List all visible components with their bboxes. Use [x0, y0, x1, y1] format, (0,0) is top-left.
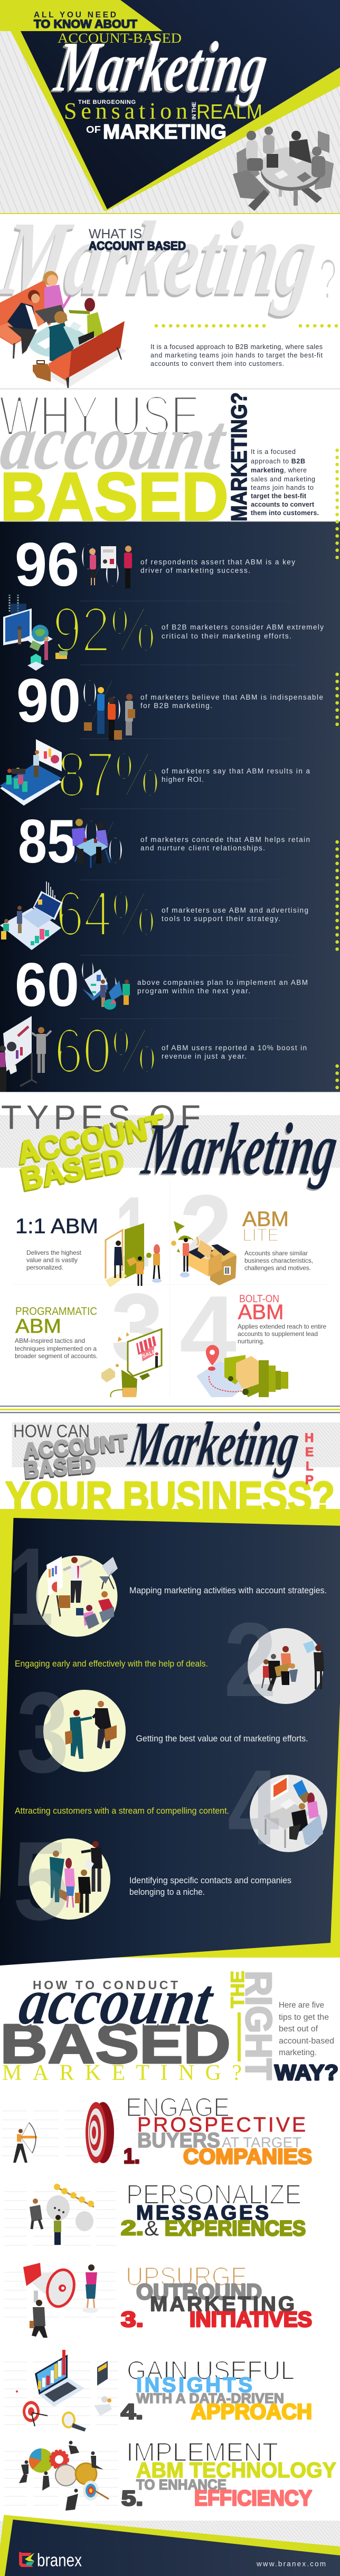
- ampersand: &: [144, 2217, 159, 2240]
- illustration: desk with monitors: [263, 1775, 323, 1848]
- stat: 64 percent: 64%: [56, 878, 156, 950]
- heading: account tilted: ACCOUNT: [23, 1430, 129, 1464]
- heading: initiatives: INITIATIVES: [190, 2307, 312, 2331]
- hero subheading: sensation: Sensation: [64, 98, 187, 124]
- title: ABM: [242, 1207, 289, 1231]
- heading: companies: COMPANIES: [183, 2144, 312, 2168]
- hero kicker: all you need: ALL YOU NEED: [34, 11, 116, 20]
- item 5: identify contacts: [13, 1818, 291, 1944]
- stat text: of respondents assert that ABM is a key: [140, 558, 295, 566]
- stat: 87 percent: 87%: [58, 739, 160, 810]
- text: Engaging early and effectively with the help of deals.: [15, 1659, 208, 1669]
- text: [129, 1876, 291, 1897]
- heading: at target: AT TARGET: [222, 2134, 301, 2151]
- panel: statistics: [0, 450, 340, 1093]
- number 3: 3.: [121, 2307, 144, 2331]
- stat text: of marketers say that ABM results in a: [162, 767, 310, 775]
- panel: footer: [0, 2515, 340, 2576]
- illustration: handshake deal: [65, 1701, 117, 1759]
- navy panel: [0, 1518, 340, 1965]
- description text: tips to get the: [279, 2013, 329, 2022]
- description text: marketing.: [279, 2048, 317, 2057]
- dotted rule: [156, 324, 340, 327]
- icon: delivery truck and map: [196, 1345, 288, 1397]
- heading: efficiency: EFFICIENCY: [194, 2486, 312, 2510]
- number 2: 2: [180, 1174, 232, 1289]
- number 5: 5: [13, 1818, 69, 1944]
- heading: account based: ACCOUNT BASED: [89, 239, 186, 253]
- description text: It is a focused: [251, 448, 296, 456]
- title: ABM: [238, 1301, 284, 1324]
- description text: best out of: [279, 2025, 318, 2033]
- item 1: mapping: [8, 1525, 327, 1649]
- stat text: for B2B marketing.: [140, 702, 212, 710]
- panel: types of account based marketing: [0, 1098, 340, 1397]
- heading: prospective: PROSPECTIVE: [137, 2114, 306, 2136]
- text: Identifying specific contacts and companies: [129, 1876, 291, 1885]
- description text: and marketing teams join hands to target the best-fit: [150, 352, 323, 359]
- title: LITE: [242, 1225, 279, 1245]
- description: Delivers the highest: [26, 1249, 82, 1256]
- text: Getting the best value out of marketing efforts.: [136, 1734, 308, 1744]
- stat: 92 percent: 92%: [53, 594, 156, 665]
- description text: approach to B2B: [251, 458, 305, 465]
- panel: why use account based marketing: [0, 384, 319, 535]
- description text: account-based: [279, 2037, 334, 2046]
- heading: personalize: PERSONALIZE: [126, 2180, 301, 2210]
- number 2: 2.: [121, 2217, 144, 2240]
- text: Attracting customers with a stream of compelling content.: [15, 1806, 229, 1816]
- hero heading: account-based: ACCOUNT-BASED: [58, 31, 182, 46]
- stat text: and nurture client relationships.: [140, 844, 265, 852]
- description text: teams join hands to: [251, 484, 314, 491]
- stat text: [162, 906, 308, 923]
- icon: laptop analytics: [0, 882, 63, 950]
- stat: 60 percent plan: %: [79, 946, 119, 1010]
- description: challenges and motives.: [244, 1264, 311, 1272]
- panel: hero: [0, 0, 340, 214]
- icon: laptop analytics: [16, 2350, 112, 2432]
- title: [15, 1305, 97, 1338]
- heading: abm technology: ABM TECHNOLOGY: [136, 2458, 336, 2482]
- hero kicker: to know about: TO KNOW ABOUT: [34, 17, 138, 31]
- description text: them into customers.: [251, 509, 319, 517]
- panel: tip 1 engage: [2, 2093, 312, 2168]
- description: [238, 1323, 326, 1345]
- item 4: compelling content: [15, 1748, 327, 1867]
- icon: handshake: [84, 687, 135, 741]
- stat text: of marketers use ABM and advertising: [162, 906, 308, 914]
- panel: tip 2 personalize: [4, 2180, 306, 2246]
- text: Mapping marketing activities with account strategies.: [129, 1586, 327, 1595]
- panel: how can ABM help your business: [0, 1409, 340, 1965]
- stat text: driver of marketing success.: [140, 566, 250, 575]
- heading: insights: INSIGHTS: [136, 2374, 252, 2397]
- heading: implement: IMPLEMENT: [126, 2437, 278, 2467]
- stat: 96 percent: %: [79, 529, 121, 601]
- stat: 90 percent: [16, 665, 323, 741]
- illustration: audience with presenter: [262, 1641, 324, 1691]
- icon: couple at cafe table: [72, 819, 110, 868]
- description text: [251, 448, 319, 517]
- icon: open boxes: [171, 1221, 237, 1285]
- logo: branex: branex: [37, 2551, 82, 2571]
- heading: help stacked: P: [305, 1473, 314, 1487]
- description: [244, 1250, 313, 1272]
- stat: 85 percent: [18, 806, 310, 878]
- heading: account script: account: [0, 398, 233, 487]
- stat text: of B2B marketers consider ABM extremely: [162, 623, 324, 631]
- panel: how to conduct ABM the right way: [0, 1965, 338, 2085]
- description: value and is vastly: [26, 1256, 78, 1264]
- panel: tip 5 implement: [4, 2437, 336, 2511]
- stat text: critical to their marketing efforts.: [162, 632, 291, 640]
- icon: megaphone: [23, 2263, 98, 2338]
- heading: types of: TYPES OF: [1, 1098, 201, 1136]
- description text: target the best-fit: [251, 492, 307, 500]
- stat text: [137, 979, 308, 995]
- panel: what is account based marketing: [0, 200, 340, 390]
- title: PROGRAMMATIC: [15, 1305, 97, 1318]
- heading: help stacked: [305, 1431, 314, 1487]
- heading: help stacked: L: [306, 1459, 314, 1474]
- description: business characteristics,: [244, 1257, 313, 1264]
- stat text: revenue in just a year.: [162, 1052, 247, 1060]
- heading: with a data-driven: WITH A DATA-DRIVEN: [136, 2390, 284, 2406]
- description: personalized.: [26, 1264, 63, 1271]
- heading: account tilted: ACCOUNT: [15, 1108, 168, 1170]
- divider lines: [0, 1406, 340, 1413]
- number 1: 1: [8, 1525, 53, 1649]
- panel: tip 3 upsurge: [4, 2262, 312, 2338]
- icon: presentation: [89, 546, 132, 588]
- card: bolt-on ABM: [180, 1275, 326, 1397]
- icon: archer and target: [13, 2102, 114, 2163]
- stat text: above companies plan to implement an ABM: [137, 979, 308, 986]
- logo: branex: [19, 2551, 82, 2571]
- stat text: [162, 1044, 307, 1060]
- icon: teamwork gears: [19, 2441, 109, 2511]
- stat: 64 percent: [0, 878, 308, 950]
- heading: the rotated: THE: [228, 1971, 248, 2008]
- heading: what is: WHAT IS: [89, 227, 142, 241]
- number 5: 5.: [121, 2487, 143, 2510]
- description: techniques implemented on a: [15, 1345, 97, 1352]
- heading: way: WAY?: [275, 2060, 338, 2085]
- stat text: tools to support their strategy.: [162, 915, 280, 923]
- hero lime wedge: [0, 0, 340, 211]
- heading: based tilted: BASED: [23, 1451, 97, 1483]
- hero subheading: marketing: MARKETING: [103, 121, 226, 143]
- heading: approach: APPROACH: [191, 2399, 312, 2424]
- stat text: [162, 767, 310, 783]
- stat: 90 percent: 90: [16, 666, 81, 735]
- description text: [279, 2001, 334, 2057]
- icon: reviews and chat bubbles: [30, 2184, 94, 2245]
- description: Accounts share similar: [244, 1250, 308, 1257]
- heading: why use: WHY USE: [0, 384, 200, 448]
- heading: help stacked: H: [305, 1431, 314, 1445]
- website url: www.branex.com: [256, 2560, 326, 2568]
- number 4: 4: [180, 1275, 237, 1387]
- title: ABM: [15, 1315, 61, 1338]
- stat text: [140, 558, 295, 575]
- description text: Here are five: [279, 2001, 324, 2010]
- hero navy triangle: [21, 0, 340, 209]
- stat: 60 percent plan: 60: [15, 950, 79, 1019]
- heading: messages: MESSAGES: [136, 2202, 269, 2224]
- heading: gain useful: GAIN USEFUL: [127, 2356, 295, 2385]
- icon: door delivery: [106, 1223, 162, 1287]
- description: [26, 1249, 82, 1271]
- stat text: [140, 693, 323, 710]
- text: belonging to a niche.: [129, 1887, 205, 1897]
- heading: account script: account: [15, 1965, 219, 2038]
- item 3: best value: [16, 1669, 308, 1797]
- heading: marketing rotated: MARKETING?: [226, 392, 251, 521]
- stat: 90 percent: %: [81, 665, 123, 737]
- hero subheading: of: OF: [86, 124, 101, 135]
- stat: 60 percent revenue: 60%: [54, 1015, 157, 1087]
- stat: 60 percent plan: [15, 946, 308, 1019]
- icon: global finance: [3, 595, 68, 671]
- heading: marketing: MARKETING: [150, 2292, 295, 2316]
- description: ABM-inspired tactics and: [15, 1337, 85, 1344]
- heading: how to conduct: HOW TO CONDUCT: [33, 1978, 178, 1992]
- description text: It is a focused approach to B2B marketing, where sales: [150, 343, 323, 351]
- stat: 60 percent revenue: [0, 1015, 307, 1092]
- number 3: 3: [111, 1274, 164, 1382]
- hero subheading: realm: REALM: [196, 101, 262, 123]
- description text: sales and marketing: [251, 476, 315, 483]
- stat: 96 percent: [15, 529, 295, 601]
- item 2: engaging: [15, 1601, 324, 1719]
- title: 1:1 ABM: [15, 1215, 98, 1238]
- stat: 96 percent: 96: [15, 530, 79, 599]
- heading: how can: HOW CAN: [13, 1421, 90, 1441]
- stat text: higher ROI.: [162, 776, 204, 783]
- icon: calendar team: [82, 969, 130, 1010]
- heading: help stacked: E: [305, 1445, 314, 1459]
- stat text: of marketers concede that ABM helps retain: [140, 836, 310, 844]
- icon: online store: SALE: [141, 1349, 157, 1360]
- description text: accounts to convert: [251, 501, 315, 508]
- illustration: business meeting on sofas: [0, 271, 127, 389]
- heading: based: BASED: [0, 458, 229, 535]
- illustration: presenter at flipchart: [42, 1556, 118, 1629]
- heading: marketing serif: MARKETING?: [2, 2061, 242, 2085]
- title: BOLT-ON: [239, 1293, 279, 1305]
- heading: based tilted: BASED: [18, 1142, 127, 1197]
- description: nurturing.: [238, 1338, 265, 1345]
- description: accounts to supplement lead: [238, 1330, 318, 1338]
- number 1: 1.: [124, 2145, 140, 2168]
- title: [242, 1207, 289, 1245]
- heading: outbound: OUTBOUND: [136, 2279, 262, 2304]
- stat text: program within the next year.: [137, 987, 250, 995]
- heading: based: BASED: [0, 2013, 231, 2075]
- hero subheading: the burgeoning: THE BURGEONING: [78, 99, 136, 105]
- dotted column: [335, 450, 339, 1089]
- stat: 85 percent: 85: [18, 807, 76, 876]
- heading: right rotated: RIGHT: [238, 1971, 279, 2080]
- heading: buyers: BUYERS: [137, 2129, 220, 2152]
- stat: 85 percent: %: [82, 806, 125, 878]
- description text: [150, 343, 323, 367]
- description: [15, 1337, 98, 1360]
- lime panel: [0, 1509, 340, 1958]
- icon: chart board: [0, 1016, 51, 1092]
- description text: accounts to convert them into customers.: [150, 360, 284, 367]
- number 4: 4: [228, 1748, 279, 1867]
- illustration: team discussion: [50, 1841, 102, 1913]
- heading: experiences: EXPERIENCES: [165, 2217, 306, 2240]
- stat: 92 percent: [3, 594, 324, 671]
- stat text: of ABM users reported a 10% boost in: [162, 1044, 307, 1052]
- stat text: [140, 836, 310, 852]
- hero subheading: in the: IN THE: [191, 102, 197, 120]
- description: broader segment of accounts.: [15, 1352, 98, 1360]
- heading: upsurge: UPSURGE: [126, 2262, 247, 2291]
- stat text: of marketers believe that ABM is indispensable: [140, 693, 323, 701]
- number 3: 3: [16, 1669, 69, 1797]
- card: ABM lite: [171, 1174, 313, 1289]
- icon: online store: [101, 1329, 162, 1397]
- number 4: 4.: [121, 2399, 143, 2424]
- description text: marketing, where: [251, 467, 307, 474]
- description: Applies extended reach to entire: [238, 1323, 326, 1330]
- heading: engage: ENGAGE: [126, 2093, 230, 2122]
- heading: to enhance: TO ENHANCE: [136, 2476, 226, 2493]
- panel: tip 4 gain insights: [4, 2350, 312, 2432]
- icon: team presentation: [0, 739, 62, 806]
- illustration: grey meeting table: [233, 127, 334, 211]
- number 2: 2: [224, 1601, 277, 1719]
- card: programmatic ABM: [15, 1274, 164, 1397]
- card: 1:1 ABM: [15, 1176, 162, 1288]
- number 1: 1: [115, 1176, 150, 1288]
- stat text: [162, 623, 324, 640]
- stat: 87 percent: [0, 739, 310, 810]
